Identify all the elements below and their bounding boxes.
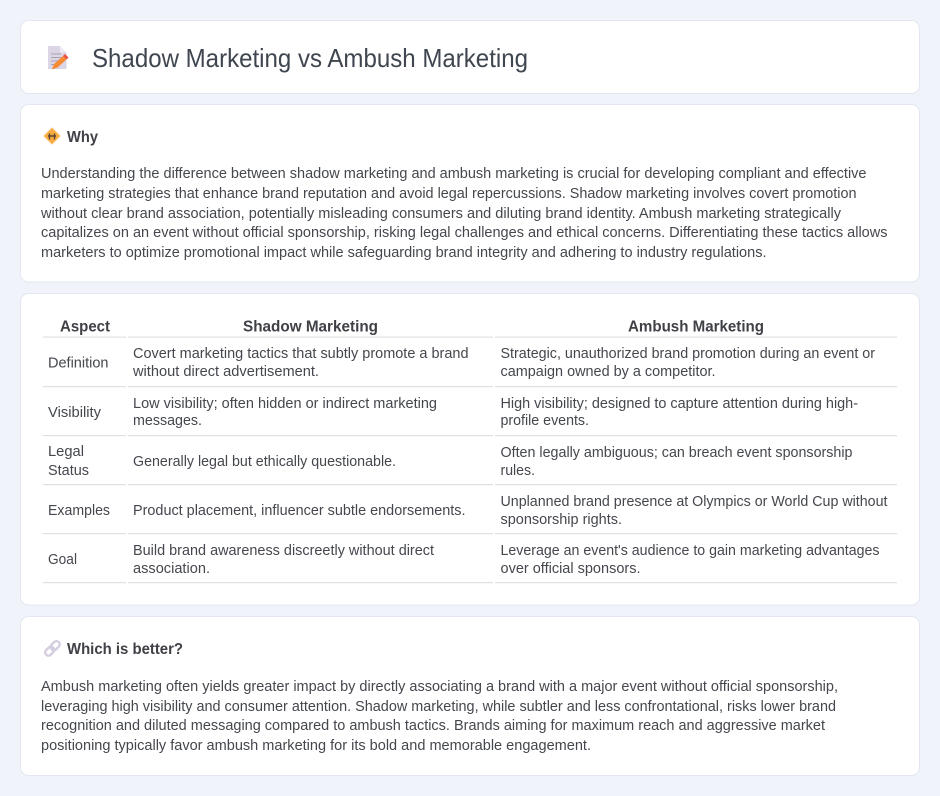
text block: why explanation: without clear brand association, potentially misleading consumers and diluting brand identity. Ambush marketing strategically [40,206,842,222]
table row: definition: Strategic, unauthorized brand promotion during an event or [500,346,875,362]
text block: why explanation: marketers to optimize promotional impact while safeguarding brand integrity and adhering to industry regulations. [41,245,767,261]
table row: examples: Product placement, influencer subtle endorsements. [133,503,466,519]
icon: memo with pencil [48,46,68,70]
table row: examples [43,494,897,534]
text block: verdict: positioning typically favor ambush marketing for its bold and memorable engagement. [41,738,591,754]
heading: which is better: Which is better? [67,641,183,658]
table row: visibility [43,396,897,436]
table row: visibility: messages. [133,413,202,429]
table row: legal status: Status [48,463,89,479]
table row: visibility: Low visibility; often hidden or indirect marketing [133,396,437,412]
table row: definition: Definition [48,356,108,372]
text block: why explanation: marketing strategies that enhance brand reputation and avoid legal repercussions. Shadow marketing involves covert promotion [41,186,856,202]
panel: why [20,104,920,282]
icon: diamond warning sign [44,128,60,144]
text block: why explanation: Understanding the difference between shadow marketing and ambush marketing is crucial for developing compliant and effective [41,166,866,182]
panel: comparison table [20,294,920,605]
table row: legal status: Generally legal but ethically questionable. [133,454,396,470]
table row: goal: Goal [48,552,77,568]
table header row [43,318,897,338]
table row: definition: without direct advertisement. [132,364,319,380]
table row: examples: Unplanned brand presence at Olympics or World Cup without [500,494,888,510]
table row: legal status: Often legally ambiguous; can breach event sponsorship [500,445,852,461]
table row: goal: Build brand awareness discreetly without direct [133,543,434,559]
table row: visibility: High visibility; designed to capture attention during high- [500,396,858,412]
table row: legal status: rules. [500,463,535,479]
heading: why: Why [67,129,98,146]
table row: legal status [43,444,897,485]
table row: definition: campaign owned by a competitor. [500,364,716,380]
table row: goal: Leverage an event's audience to gain marketing advantages [500,543,880,559]
table header row: Ambush Marketing [628,318,764,336]
panel: title header [20,20,920,94]
table row: definition: Covert marketing tactics that subtly promote a brand [133,346,468,362]
text block: verdict: leveraging high visibility and consumer attention. Shadow marketing, while subtler and less confrontational, risks lower brand [41,699,836,715]
text block: why explanation [40,166,888,261]
table header row: Shadow Marketing [243,318,378,336]
table row: definition [43,346,897,387]
table row: visibility: Visibility [48,405,102,421]
table row: goal: association. [133,561,210,577]
text block: verdict [41,679,838,754]
table row: examples: Examples [48,503,110,519]
table row: legal status: Legal [48,444,84,460]
table row: goal: over official sponsors. [500,561,640,577]
text block: verdict: Ambush marketing often yields greater impact by directly associating a brand with a major event without official sponsorship, [41,679,838,695]
table row: goal [43,543,897,583]
text block: verdict: recognition and diluted messaging compared to ambush tactics. Brands aiming for maximum reach and aggressive market [41,718,825,734]
table row: examples: sponsorship rights. [500,512,622,528]
icon: chain link [44,640,61,657]
text block: why explanation: capitalizes on an event without official sponsorship, risking legal challenges and ethical concerns. Differentiating these tactics allows [41,225,888,241]
title: Shadow Marketing vs Ambush Marketing [92,43,528,73]
table row: visibility: profile events. [500,413,589,429]
table header row: Aspect [60,318,111,336]
panel: which is better [20,616,920,776]
